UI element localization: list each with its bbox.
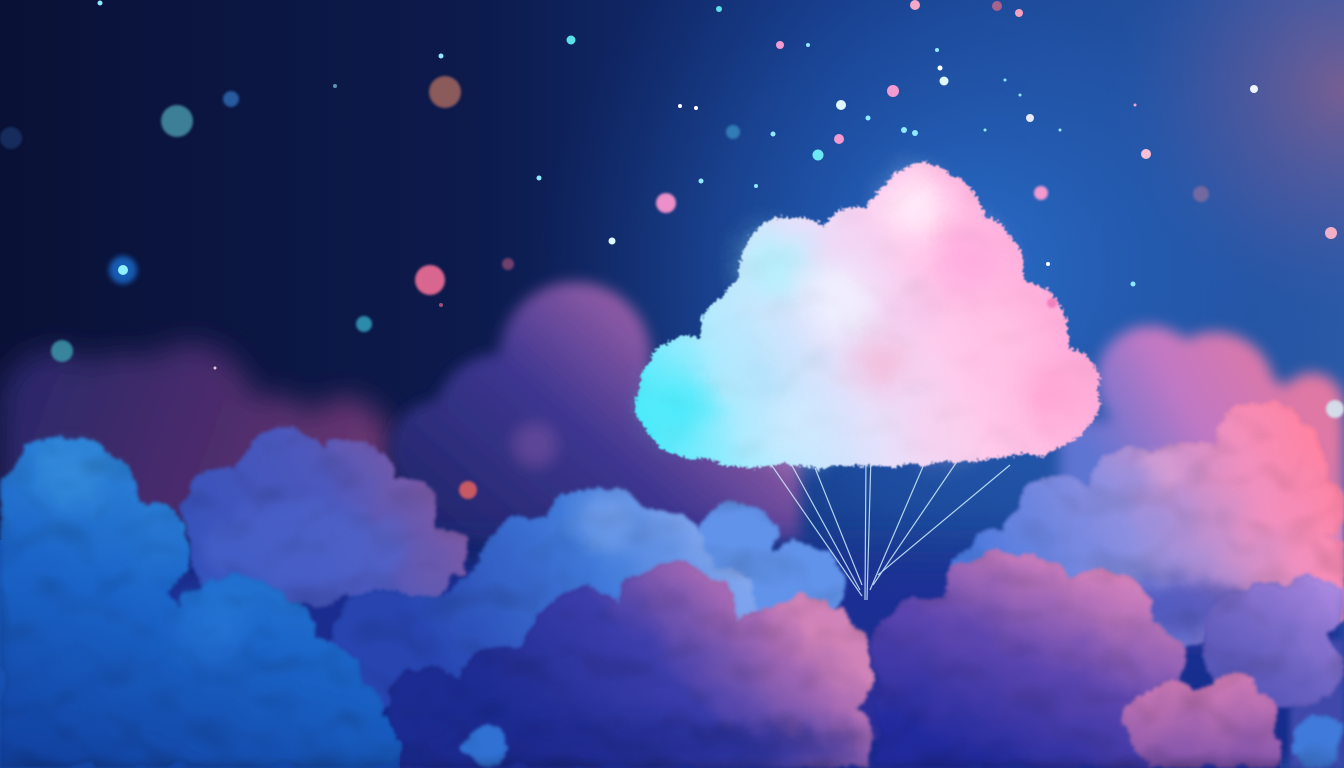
cloud: back right pink [1060,326,1344,500]
cloud: back left purple [0,343,390,530]
cloud: far center light blue [660,502,845,642]
background clouds [0,282,1344,768]
main cloud shading [650,175,1078,460]
main cloud: cyan to pink [635,164,1100,466]
cloud: middle left blue-violet [181,428,468,617]
cloud: bottom right [871,548,1280,768]
foreground clouds [0,438,1280,768]
main cloud body [635,164,1100,466]
backing: foreground edge fill [0,540,1280,768]
cloud: bottom center [388,564,872,768]
cloud: right large pink [956,402,1344,643]
cloud: middle center blue [319,482,754,715]
cloud: lower right edge [1203,573,1344,768]
cloud: back center purple [390,282,800,540]
cloud: bottom blue puff [466,724,510,768]
lines: cloud strings [768,455,1010,600]
cloud: front left blue [0,438,398,768]
base fill behind lower clouds [0,520,1344,768]
particles: small sparkles [98,0,1337,370]
particles: large bokeh [0,76,1344,499]
particles: glowing blue star [109,256,137,284]
